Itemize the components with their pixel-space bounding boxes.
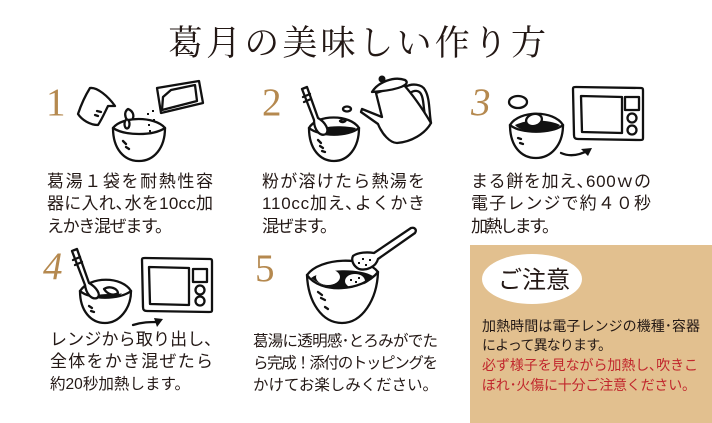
step 5 text xyxy=(253,332,438,394)
step 3 text: 加熱します。 xyxy=(471,217,559,236)
caution text xyxy=(482,318,700,393)
step 4 text: 全体をかき混ぜたら xyxy=(50,352,213,371)
step 2 text xyxy=(262,172,425,236)
title: 葛月の美味しい作り方 xyxy=(168,24,546,63)
step 5 text: ら完成！添付のトッピングを xyxy=(253,354,438,372)
step 4 text: 約20秒加熱します。 xyxy=(50,375,190,393)
step 1 text: えかき混ぜます。 xyxy=(47,217,172,236)
step 2 text: 混ぜます。 xyxy=(262,217,337,236)
step 4 text: レンジから取り出し､ xyxy=(50,330,213,349)
step 3 number: 3 xyxy=(470,81,490,124)
icon: finished bowl with spoon xyxy=(307,228,416,323)
step 5 text: かけてお楽しみください。 xyxy=(253,376,438,394)
caution heading: ご注意 xyxy=(498,267,570,294)
step 1 text: 葛湯１袋を耐熱性容 xyxy=(47,172,213,191)
caution text: によって異なります。 xyxy=(482,337,612,353)
panel: caution xyxy=(470,245,712,423)
step 2 text: 110cc加え､よくかき xyxy=(262,194,425,213)
icon: bowl with spoon and kettle xyxy=(302,76,431,161)
icon: mochi, bowl and microwave with arrow xyxy=(509,87,643,158)
step 3 text: まる餅を加え､600ｗの xyxy=(471,172,651,191)
step 1 text: 器に入れ､水を10cc加 xyxy=(47,194,213,213)
step 2 text: 粉が溶けたら熱湯を xyxy=(262,172,425,191)
step 1 text xyxy=(47,172,213,236)
step 2 number: 2 xyxy=(262,81,282,124)
step 4 number: 4 xyxy=(43,245,62,288)
caution heading xyxy=(482,254,582,304)
step 4 text xyxy=(50,330,213,393)
caution text: 加熱時間は電子レンジの機種･容器 xyxy=(482,318,700,334)
step 3 text xyxy=(471,172,651,236)
caution text: ぼれ･火傷に十分ご注意ください。 xyxy=(482,377,696,393)
step 5 number: 5 xyxy=(255,247,274,290)
icon: bowl with spoon and microwave with arrow xyxy=(72,249,212,327)
step 1 number: 1 xyxy=(46,81,66,124)
caution text: 必ず様子を見ながら加熱し､吹きこ xyxy=(482,357,698,373)
step 3 text: 電子レンジで約４０秒 xyxy=(471,194,651,213)
step 5 text: 葛湯に透明感･とろみがでた xyxy=(253,332,438,350)
icon: measuring cup, packet and bowl xyxy=(78,81,203,161)
